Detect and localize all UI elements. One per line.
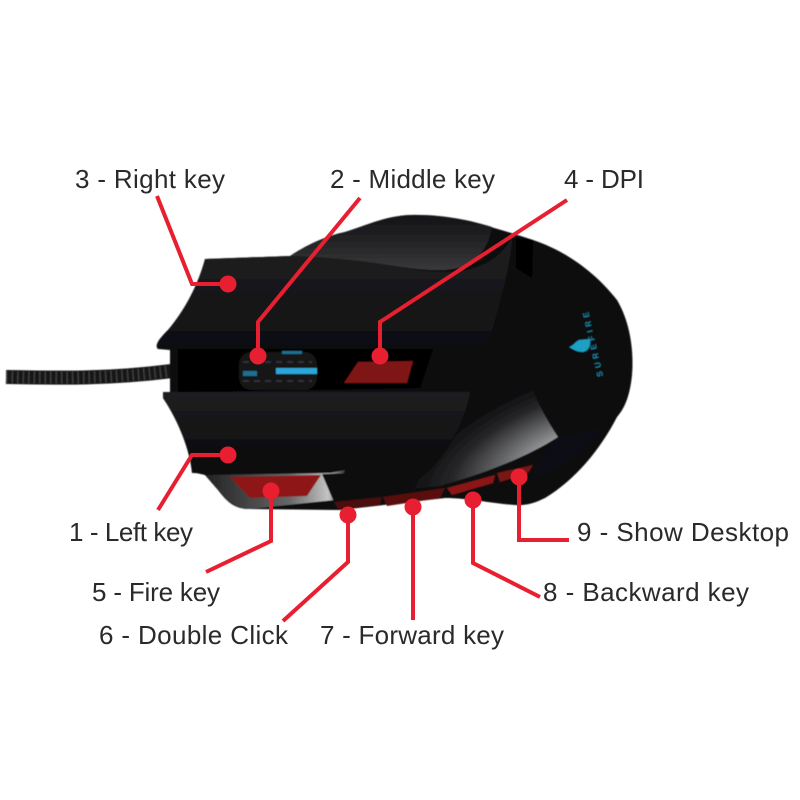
glossy side panel bbox=[400, 238, 558, 490]
fire key bbox=[230, 475, 321, 498]
callout 3: right key: 3 - Right key bbox=[75, 164, 225, 194]
left key bbox=[163, 392, 470, 473]
right key bbox=[157, 238, 512, 349]
callout 1: left key bbox=[69, 446, 236, 547]
callout 1: left key: 1 - Left key bbox=[69, 517, 193, 547]
side key 7 bbox=[383, 488, 445, 506]
callout 2: middle key: 2 - Middle key bbox=[330, 164, 495, 194]
callout 8: backward key bbox=[464, 492, 749, 607]
callout 2: middle key bbox=[250, 164, 495, 364]
callout 6: double click bbox=[99, 506, 356, 650]
callout 5: fire key: 5 - Fire key bbox=[92, 577, 220, 607]
side key 6 bbox=[334, 497, 382, 509]
callout 9: show desktop bbox=[510, 468, 789, 547]
callout 7: forward key bbox=[320, 498, 504, 650]
fire key surround bbox=[205, 470, 345, 509]
brand logo bbox=[569, 311, 605, 378]
callout 4: DPI bbox=[372, 164, 644, 364]
callout 5: fire key bbox=[92, 482, 280, 607]
DPI key bbox=[344, 361, 413, 383]
callout 3: right key bbox=[75, 164, 236, 292]
callout 9: show desktop: 9 - Show Desktop bbox=[577, 517, 789, 547]
callout 8: backward key: 8 - Backward key bbox=[543, 577, 749, 607]
side key 8 bbox=[447, 475, 495, 495]
mouse body bbox=[157, 215, 632, 510]
palm rest bbox=[290, 215, 492, 270]
lower shell edge bbox=[533, 426, 606, 480]
mouse illustration bbox=[6, 215, 632, 510]
side key 9 bbox=[497, 465, 533, 482]
callout 7: forward key: 7 - Forward key bbox=[320, 620, 504, 650]
dark side notch bbox=[516, 238, 533, 278]
callout 4: DPI: 4 - DPI bbox=[564, 164, 644, 194]
brand logo: SUREFIRE bbox=[581, 311, 605, 378]
scroll wheel and buttons bbox=[239, 351, 317, 390]
cable bbox=[6, 371, 172, 378]
callout 6: double click: 6 - Double Click bbox=[99, 620, 289, 650]
middle strip bbox=[178, 349, 433, 392]
